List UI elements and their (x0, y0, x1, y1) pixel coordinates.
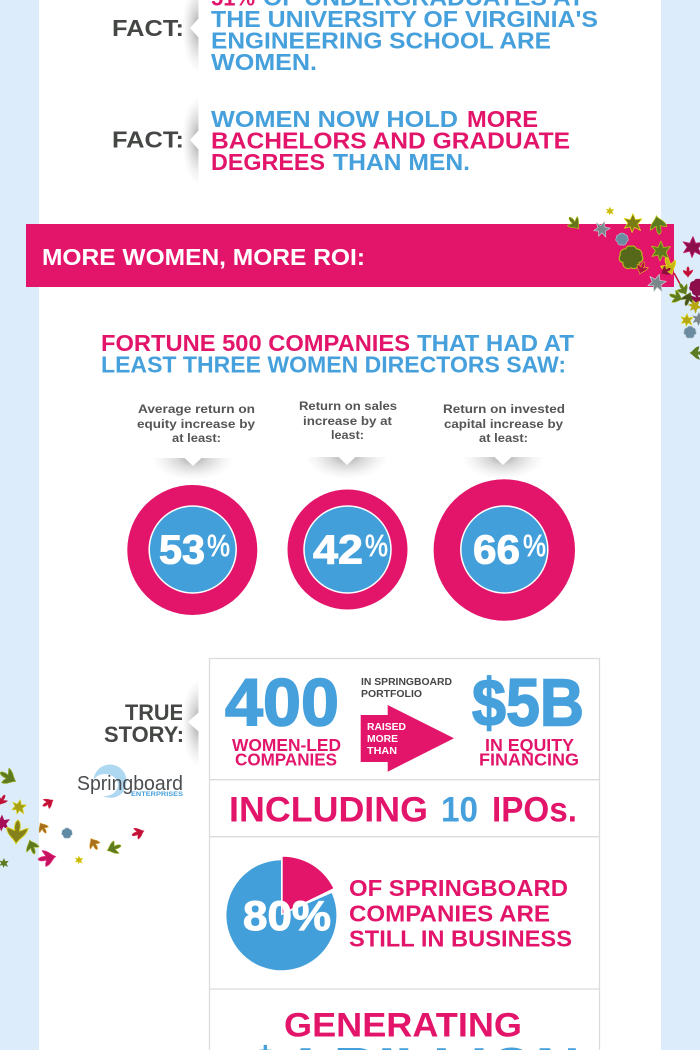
fact text: BACHELORS AND GRADUATE (211, 128, 570, 154)
notch shadow (182, 0, 199, 72)
true story label: STORY: (104, 722, 184, 747)
pie chart: 80% (226, 857, 336, 970)
pointer shadow (152, 458, 234, 480)
stat caption: at least: (479, 433, 528, 445)
arrow: raised more than: PORTFOLIO (361, 689, 422, 700)
fact text: ENGINEERING SCHOOL ARE (211, 28, 551, 54)
fact text: WOMEN. (211, 49, 317, 75)
true story label (104, 700, 184, 747)
stat caption: Return on sales (299, 401, 397, 413)
fact label: FACT: (112, 126, 184, 152)
subheading: LEAST THREE WOMEN DIRECTORS SAW: (101, 352, 566, 378)
ring chart (288, 490, 408, 610)
Springboard Enterprises logo: Springboard (77, 773, 183, 795)
stat: 400 companies: WOMEN-LED (232, 735, 341, 755)
fact block: University of Virginia (112, 0, 598, 75)
stat: return on equity (127, 404, 257, 615)
ring chart: 53 (159, 526, 205, 572)
arrow: raised more than: RAISED (367, 721, 406, 733)
ring chart: % (207, 528, 230, 563)
still in business text (349, 875, 572, 952)
fact text: MORE (467, 106, 538, 132)
still in business text: OF SPRINGBOARD (349, 875, 568, 901)
including 10 IPOs: IPOs. (492, 790, 577, 830)
ring chart (434, 479, 575, 621)
stat: 400 companies: COMPANIES (235, 750, 337, 770)
stat caption (299, 401, 397, 442)
stat: return on sales (288, 401, 408, 610)
fact text (211, 0, 598, 75)
pointer shadow (306, 456, 388, 479)
generating heading: GENERATING (284, 1006, 522, 1044)
including 10 IPOs: INCLUDING (229, 790, 428, 830)
ring chart: 42 (313, 526, 363, 572)
stat: $5B: FINANCING (479, 750, 579, 770)
ring chart: % (523, 528, 546, 563)
arrow: raised more than: MORE (367, 733, 398, 745)
leaf cluster: lower left (0, 765, 146, 868)
Springboard Enterprises logo: ENTERPRISES (131, 791, 184, 798)
stat caption: capital increase by (444, 419, 564, 431)
stat caption: equity increase by (137, 419, 256, 431)
arrow: raised more than: THAN (367, 745, 397, 757)
subheading: FORTUNE 500 COMPANIES (101, 330, 410, 356)
notch shadow (182, 679, 199, 767)
stat caption (137, 404, 256, 445)
subheading: THAT HAD AT (417, 330, 574, 356)
table frame and rows (210, 658, 600, 1050)
story table (210, 658, 600, 1050)
stat caption: increase by at (303, 416, 392, 428)
stat: $5B: $5B (472, 666, 584, 740)
fact text (211, 106, 570, 175)
fact block: degrees (112, 96, 570, 184)
including 10 IPOs (229, 790, 577, 830)
fact text: WOMEN NOW HOLD (211, 106, 458, 132)
fact text: THE UNIVERSITY OF VIRGINIA'S (211, 6, 598, 32)
still in business text: STILL IN BUSINESS (349, 926, 572, 952)
pointer shadow (462, 456, 544, 479)
ring chart: 66 (473, 526, 520, 572)
including 10 IPOs: 10 (441, 790, 478, 830)
ring chart (127, 485, 257, 615)
stat caption: Average return on (138, 404, 255, 416)
stat: 400 companies: 400 (225, 666, 339, 740)
banner heading: MORE WOMEN, MORE ROI: (42, 244, 365, 270)
stat caption (443, 404, 565, 445)
stat caption: Return on invested (443, 404, 565, 416)
fact label: FACT: (112, 15, 184, 41)
stat: $5B: IN EQUITY (485, 735, 574, 755)
stat: 400 companies (225, 666, 341, 770)
arrow: raised more than: IN SPRINGBOARD (361, 677, 452, 688)
notch shadow (182, 96, 199, 184)
subheading (101, 330, 574, 378)
fact text: DEGREES (211, 149, 325, 175)
ring chart: % (365, 528, 388, 563)
stat: return on invested capital (434, 404, 575, 621)
pie chart: 80%: 80% (243, 892, 331, 939)
Springboard Enterprises logo (77, 764, 184, 798)
section banner (26, 224, 674, 287)
stat: $5B (472, 666, 584, 770)
leaf cluster: top right (564, 207, 700, 360)
stat caption: at least: (172, 433, 221, 445)
stat caption: least: (331, 430, 364, 442)
arrow: raised more than (361, 677, 454, 772)
still in business text: COMPANIES ARE (349, 900, 550, 926)
true story label: TRUE (125, 700, 184, 725)
fact text: THAN MEN. (333, 149, 470, 175)
